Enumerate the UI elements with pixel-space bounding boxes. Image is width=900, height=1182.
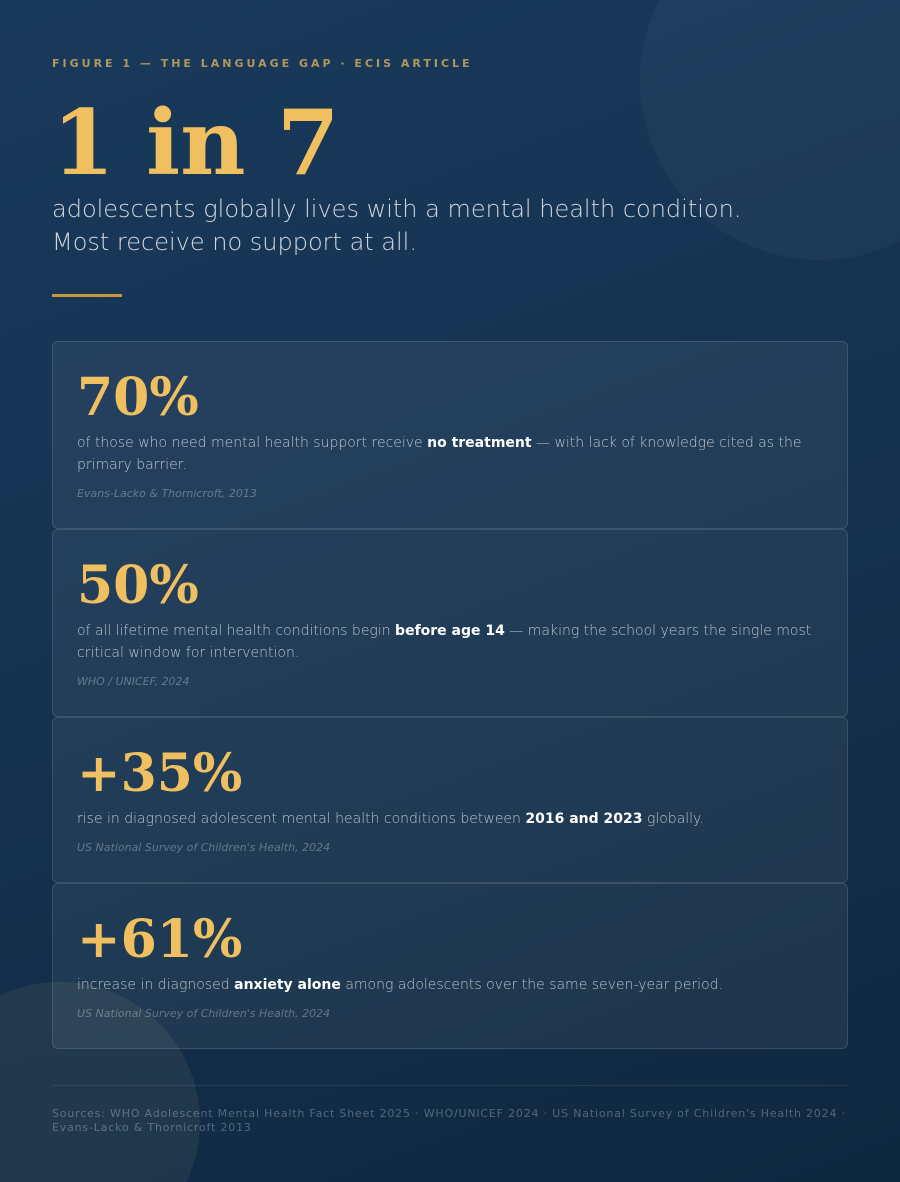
panel: +61% stat card (52, 883, 848, 1049)
stat number: 70% (77, 367, 199, 428)
citation: Evans-Lacko & Thornicroft, 2013 (77, 487, 257, 500)
stat number: +61% (77, 909, 242, 970)
citation: US National Survey of Children's Health, 2024 (77, 1007, 330, 1020)
accent rule (52, 294, 122, 297)
decorative circle: bottom left (0, 982, 200, 1182)
citation: WHO / UNICEF, 2024 (77, 675, 190, 688)
stat description: of those who need mental health support receive no treatment — with lack of knowledge cited as the primary barrier. (77, 435, 801, 473)
subtitle: Most receive no support at all. (52, 228, 417, 256)
stat number: +35% (77, 743, 242, 804)
subtitle: adolescents globally lives with a mental health condition. (52, 195, 741, 223)
stat description: rise in diagnosed adolescent mental health conditions between 2016 and 2023 globally. (77, 811, 704, 827)
eyebrow label: FIGURE 1 — THE LANGUAGE GAP · ECIS ARTICLE (52, 57, 473, 70)
stat number: 50% (77, 555, 199, 616)
stat description: of all lifetime mental health conditions begin before age 14 — making the school years the single most critical window for intervention. (77, 623, 811, 661)
headline statistic: 1 in 7 (52, 90, 340, 196)
citation: US National Survey of Children's Health, 2024 (77, 841, 330, 854)
stat description: increase in diagnosed anxiety alone among adolescents over the same seven-year period. (77, 977, 723, 993)
sources footer: Sources: WHO Adolescent Mental Health Fact Sheet 2025 · WHO/UNICEF 2024 · US National Survey of Children's Health 2024 · Evans-Lacko & Thornicroft 2013 (52, 1107, 846, 1134)
panel: 50% stat card (52, 529, 848, 717)
panel: 70% stat card (52, 341, 848, 529)
decorative circle: top right (640, 0, 900, 260)
subtitle (52, 195, 741, 256)
panel: +35% stat card (52, 717, 848, 883)
